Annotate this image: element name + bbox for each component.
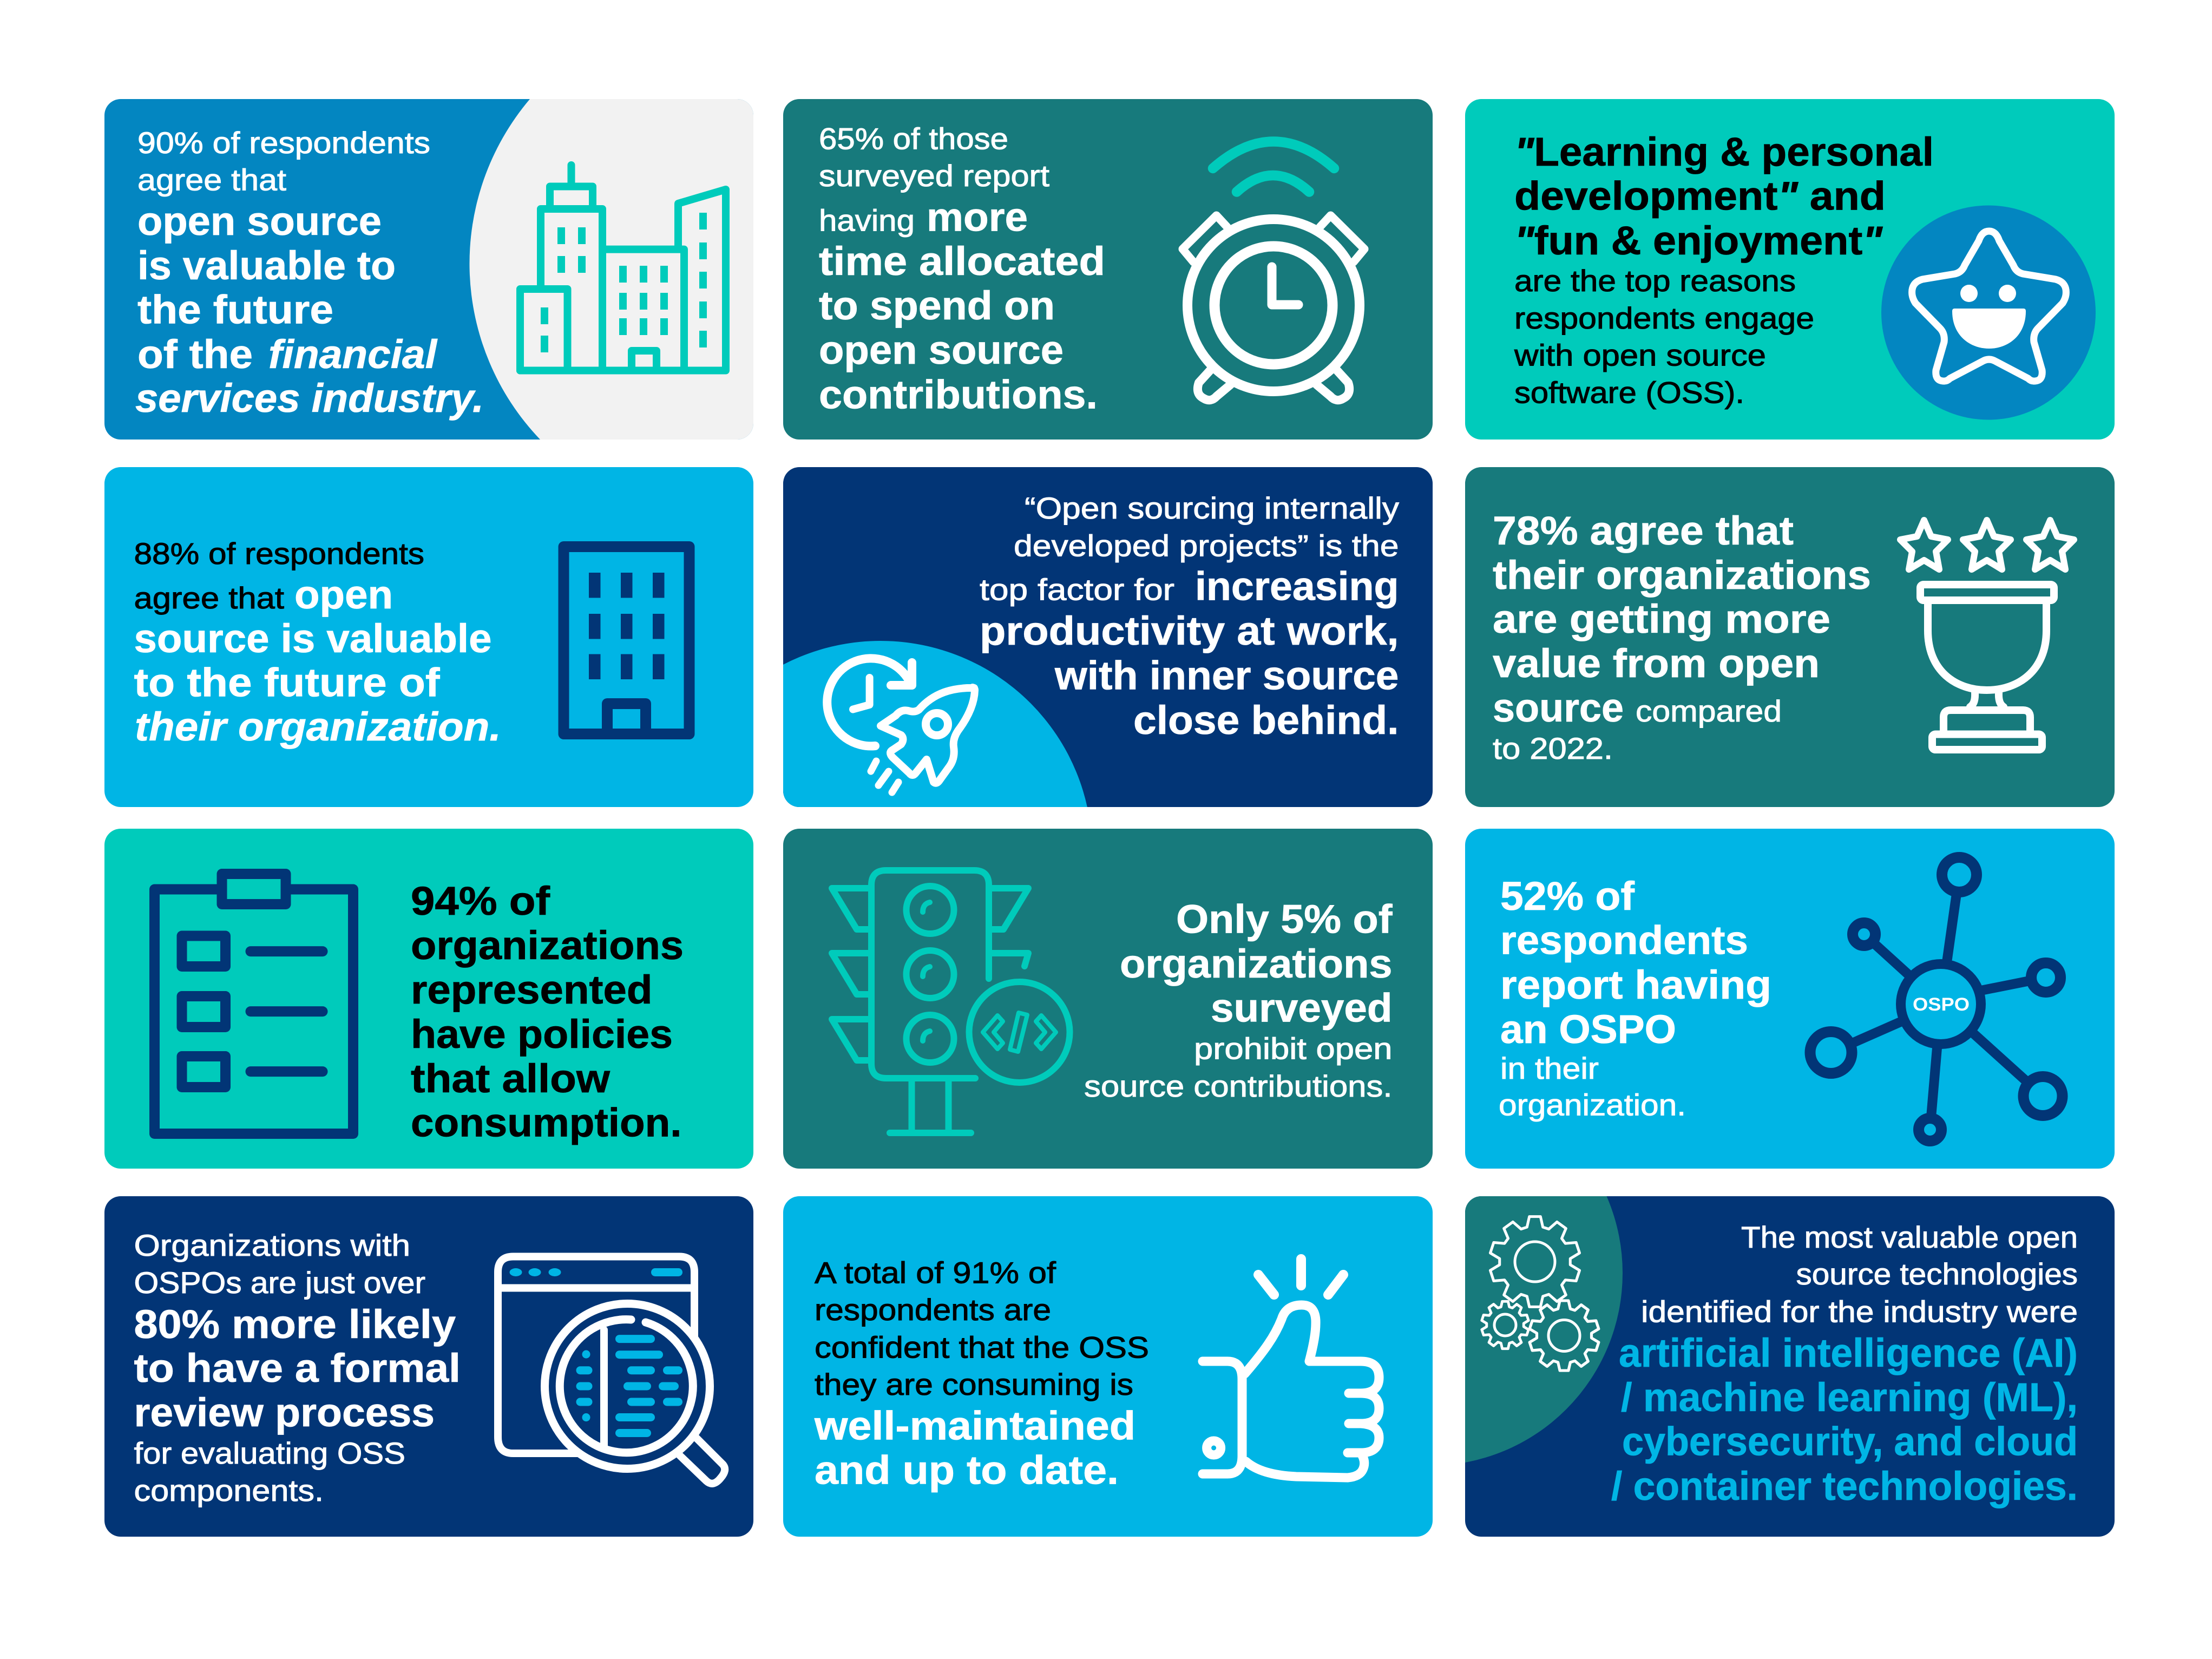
text: 52% of respondents: an OSPO — [1500, 1007, 1676, 1052]
text: 94% of organizations: consumption. — [411, 1100, 682, 1145]
panel background — [783, 829, 1433, 1169]
text: open sourcing internally: increasing — [1195, 564, 1399, 609]
panel background — [783, 467, 1433, 807]
text: 52% of respondents: organization. — [1499, 1088, 1686, 1122]
panel: 52% OSPO — [1465, 829, 2115, 1169]
text: a total of 91%: A total of 91% of — [815, 1256, 1056, 1290]
panel: learning and fun — [1465, 99, 2115, 440]
text: 90% of respondents: of the — [137, 332, 253, 377]
text: 52% of respondents: 52% of — [1500, 874, 1635, 919]
text: 94% of organizations: that allow — [411, 1056, 610, 1101]
text: 90% of respondents: agree that — [137, 162, 286, 197]
text: open sourcing internally: close behind. — [1133, 698, 1399, 743]
panel background — [783, 1196, 1433, 1537]
text: 65% of those surveyed: to spend on — [819, 283, 1055, 328]
text: 78% agree: value from open — [1493, 641, 1820, 686]
text: a total of 91%: and up to date. — [815, 1447, 1119, 1492]
text: most valuable open source technologies: / container technologies. — [1611, 1464, 2078, 1509]
text: most valuable open source technologies: The most valuable open — [1741, 1220, 2078, 1254]
panel background — [1465, 829, 2115, 1169]
text: top reasons to engage: development " and — [1514, 174, 1886, 219]
text: 94% of organizations: represented — [411, 967, 653, 1012]
panel background — [1465, 1196, 2115, 1537]
text: organizations with OSPOs: 80% more likely — [134, 1302, 456, 1347]
cyan curved area — [783, 641, 1087, 807]
text: only 5% of organizations — [1084, 897, 1393, 1103]
panel: 78% more value — [1465, 467, 2115, 807]
text: most valuable open source technologies: artificial intelligence (AI) — [1619, 1330, 2078, 1375]
text: 65% of those surveyed: more — [927, 195, 1028, 239]
text: 78% agree: to 2022. — [1493, 731, 1613, 765]
icon: browser window with magnifier — [498, 1257, 725, 1484]
text: 65% of those surveyed: 65% of those — [819, 122, 1008, 156]
text: organizations with OSPOs — [134, 1228, 461, 1507]
text: a total of 91% — [814, 1256, 1149, 1492]
icon: city buildings — [520, 165, 726, 370]
text: most valuable open source technologies: source technologies — [1796, 1257, 2078, 1291]
panel background — [104, 467, 753, 807]
text: 94% of organizations: organizations — [411, 923, 684, 968]
text: open sourcing internally: top factor for — [980, 573, 1174, 607]
panel: only 5% prohibit — [783, 829, 1433, 1169]
text: top reasons to engage: "fun & enjoyment " — [1514, 218, 1883, 263]
panel: 65% time allocated — [783, 99, 1433, 440]
text: 52% of respondents: respondents — [1500, 918, 1748, 963]
text: a total of 91%: confident that the OSS — [815, 1330, 1149, 1365]
text: 88% of respondents: agree that — [134, 581, 284, 615]
text: 65% of those surveyed: surveyed report — [819, 159, 1049, 193]
text: most valuable open source technologies: identified for the industry were — [1641, 1295, 2078, 1329]
text: organizations with OSPOs: Organizations with — [134, 1228, 410, 1262]
text: 78% agree — [1493, 508, 1871, 765]
icon: traffic light with code badge — [832, 870, 1069, 1133]
text: most valuable open source technologies: / machine learning (ML), — [1621, 1375, 2078, 1420]
text: only 5% of organizations: surveyed — [1211, 985, 1392, 1031]
icon: clipboard checklist — [155, 874, 353, 1133]
panel background — [104, 99, 753, 440]
text: 78% agree: compared — [1636, 694, 1782, 728]
text: 94% of organizations — [411, 878, 684, 1145]
icon: office building — [564, 547, 690, 734]
text: only 5% of organizations: Only 5% of — [1176, 897, 1393, 942]
text: open sourcing internally: developed projects” is the — [1014, 529, 1399, 563]
text: 88% of respondents: open — [294, 572, 393, 617]
panel background — [104, 829, 753, 1169]
text: 90% of respondents: services industry. — [135, 376, 484, 421]
text: open sourcing internally: with inner source — [1054, 653, 1399, 698]
panel: 91% well-maintained — [783, 1196, 1433, 1537]
icon: alarm clock — [1183, 142, 1364, 400]
panel background — [783, 99, 1433, 440]
text: only 5% of organizations: organizations — [1120, 941, 1392, 986]
text: open sourcing internally: “Open sourcing internally — [1025, 491, 1399, 525]
text: top reasons to engage: "Learning & personal — [1514, 129, 1934, 174]
icon: trophy with three stars — [1900, 520, 2074, 750]
icon: thumbs up — [1203, 1259, 1379, 1478]
text: only 5% of organizations: source contributions. — [1084, 1069, 1392, 1103]
text: 65% of those surveyed: time allocated — [819, 239, 1105, 284]
text: most valuable open source technologies: cybersecurity, and cloud — [1622, 1419, 2078, 1464]
text: 90% of respondents: financial — [268, 332, 437, 377]
panel background — [1465, 467, 2115, 807]
text: 65% of those surveyed: having — [819, 204, 915, 237]
panel: 90% financial services — [104, 99, 753, 440]
text: organizations with OSPOs: components. — [134, 1473, 324, 1507]
text: top reasons to engage: with open source — [1514, 338, 1766, 372]
text: organizations with OSPOs: for evaluating OSS — [134, 1436, 405, 1470]
text: only 5% of organizations: prohibit open — [1194, 1032, 1392, 1065]
text: 52% of respondents: in their — [1500, 1051, 1599, 1085]
text: 90% of respondents: is valuable to — [137, 243, 396, 288]
text: a total of 91%: respondents are — [815, 1293, 1051, 1327]
panel background — [104, 1196, 753, 1537]
text: 88% of respondents: their organization. — [135, 704, 501, 749]
text: 78% agree: their organizations — [1493, 553, 1871, 598]
text: 78% agree: are getting more — [1493, 596, 1830, 641]
text: organizations with OSPOs: review process — [134, 1390, 435, 1435]
icon: OSPO hub network: OSPO — [1913, 994, 1970, 1015]
grey curved area — [469, 99, 753, 440]
panel: 88% their organization — [104, 467, 753, 807]
icon: three gears — [1482, 1217, 1599, 1371]
panel: increasing productivity — [783, 467, 1433, 807]
text: most valuable open source technologies — [1611, 1220, 2078, 1509]
icon: smiling star — [1881, 206, 2096, 420]
panel background — [1465, 99, 2115, 440]
text: 52% of respondents — [1499, 874, 1771, 1122]
text: a total of 91%: they are consuming is — [815, 1367, 1133, 1401]
text: 94% of organizations: 94% of — [411, 878, 550, 923]
text: 78% agree: source — [1493, 685, 1624, 730]
text: 94% of organizations: have policies — [411, 1012, 673, 1057]
text: 90% of respondents: the future — [137, 287, 333, 332]
panel: 80% more likely — [104, 1196, 753, 1537]
text: open sourcing internally: productivity at work, — [980, 608, 1399, 653]
text: top reasons to engage: software (OSS). — [1514, 375, 1744, 409]
icon: OSPO hub network — [1810, 857, 2062, 1141]
icon: rocket and clock — [827, 658, 975, 792]
text: 65% of those surveyed: contributions. — [819, 372, 1098, 417]
text: 88% of respondents: 88% of respondents — [134, 536, 424, 571]
text: organizations with OSPOs: to have a formal — [134, 1346, 461, 1391]
teal curved area — [1465, 1196, 1623, 1463]
text: top reasons to engage — [1514, 129, 1934, 409]
text: top reasons to engage: respondents engage — [1514, 301, 1814, 335]
panel: 94% policies — [104, 829, 753, 1169]
text: top reasons to engage: are the top reasons — [1514, 264, 1796, 298]
text: 65% of those surveyed — [819, 122, 1105, 417]
text: 52% of respondents: report having — [1500, 962, 1771, 1007]
text: 88% of respondents: to the future of — [134, 660, 440, 705]
text: open sourcing internally — [980, 491, 1399, 743]
text: 78% agree: 78% agree that — [1493, 508, 1794, 553]
panel: most valuable technologies — [1465, 1196, 2115, 1537]
text: organizations with OSPOs: OSPOs are just over — [134, 1265, 425, 1300]
text: 90% of respondents: open source — [137, 199, 382, 244]
text: a total of 91%: well-maintained — [814, 1403, 1135, 1448]
text: 90% of respondents — [135, 126, 484, 421]
text: 90% of respondents: 90% of respondents — [137, 126, 430, 160]
text: 88% of respondents — [134, 536, 501, 749]
text: 65% of those surveyed: open source — [819, 327, 1064, 372]
text: 88% of respondents: source is valuable — [134, 616, 491, 661]
